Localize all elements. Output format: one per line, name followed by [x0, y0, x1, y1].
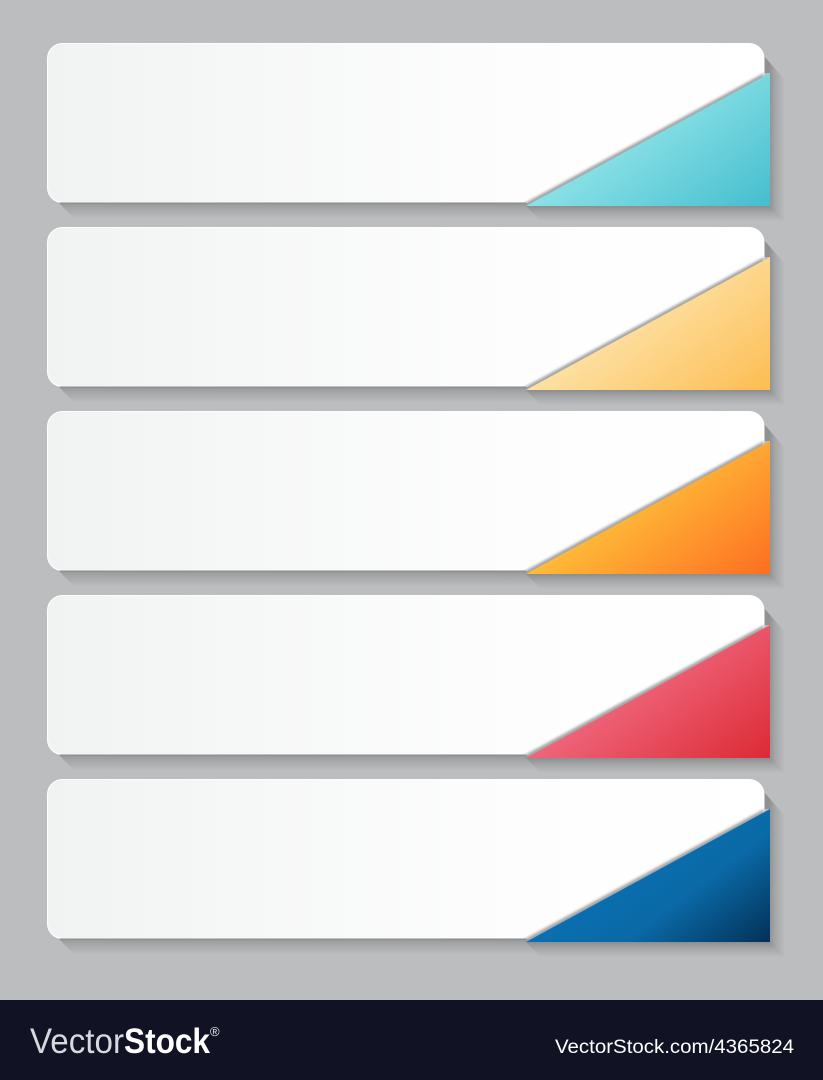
triangle: orange	[526, 441, 770, 574]
panel: banner 5	[48, 780, 785, 957]
panel: banner 1	[48, 44, 785, 221]
panel: banner 3	[48, 412, 785, 589]
footer bar	[0, 1000, 823, 1080]
triangle: teal	[526, 73, 770, 206]
logo: Vector: Vector	[30, 1022, 124, 1061]
triangle: red	[526, 625, 770, 758]
logo registered mark: ®	[210, 1024, 220, 1039]
panel: banner 4	[48, 596, 785, 773]
logo: Stock: Stock	[124, 1022, 210, 1061]
triangle: pale yellow	[526, 257, 770, 390]
panel: banner 2	[48, 228, 785, 405]
image id link text: VectorStock.com/4365824	[555, 1037, 794, 1058]
triangle: blue	[526, 809, 770, 942]
